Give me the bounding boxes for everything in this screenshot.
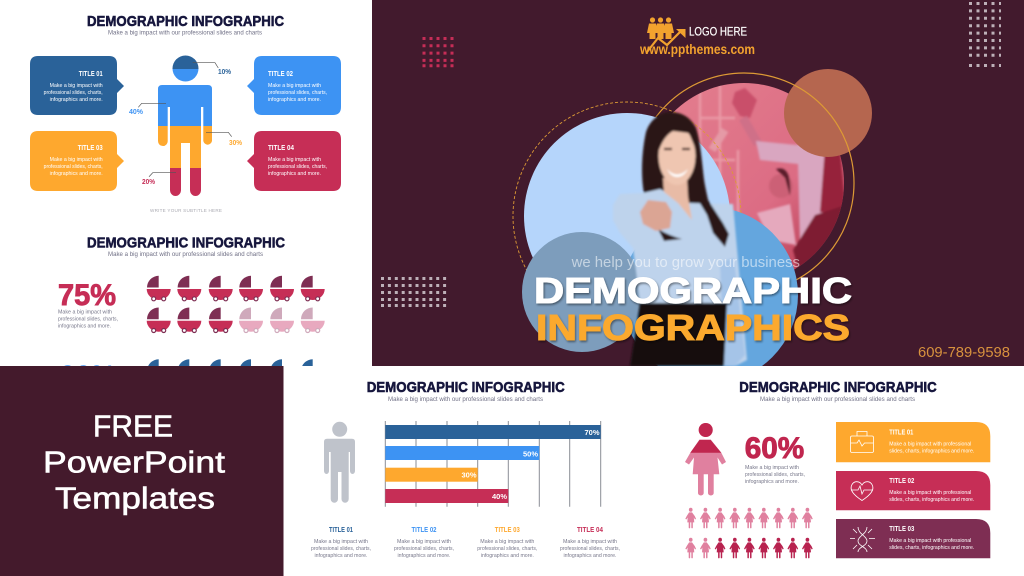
text block: women description: infographics and more. <box>745 479 799 485</box>
chart: horizontal bars <box>385 421 601 507</box>
chart: horizontal bars: 30% <box>461 470 477 480</box>
heading: free: FREE <box>93 409 173 444</box>
card: title 03 <box>836 519 990 558</box>
icon: grey person <box>324 422 355 503</box>
callout: title 02 <box>247 56 341 115</box>
window frames <box>700 85 738 215</box>
gold ring <box>655 72 855 280</box>
medium blue circle <box>630 210 798 366</box>
text block: women description: professional slides, charts, <box>745 472 805 478</box>
subtitle: slide one: Make a big impact with our professional slides and charts <box>108 30 262 36</box>
icon: heart pulse <box>851 482 873 500</box>
dot grid: top right <box>969 4 1001 66</box>
front hair left <box>658 229 682 241</box>
pictogram: row of light women <box>685 508 813 528</box>
panel: cover photo banner <box>372 0 1024 383</box>
callout: title 03: TITLE 03 <box>78 145 103 152</box>
column: title 04: Make a big impact with <box>563 539 617 545</box>
callout leaders and percentages <box>129 63 242 186</box>
card: title 01: slides, charts, infographics and more. <box>889 448 974 454</box>
callout: title 02: TITLE 02 <box>268 71 293 78</box>
smile <box>667 169 688 177</box>
callout: title 04 <box>247 131 341 191</box>
text block: stroller description: professional slides, charts, <box>58 316 118 322</box>
heading: templates: Templates <box>55 481 215 516</box>
heading: bar slide title: DEMOGRAPHIC INFOGRAPHIC <box>367 379 565 396</box>
callout: title 04: TITLE 04 <box>268 145 294 152</box>
text block: women description: Make a big impact with <box>745 465 799 471</box>
panel: free templates <box>0 366 284 576</box>
light blue circle <box>524 113 730 258</box>
callout leaders and percentages: 20% <box>142 177 155 186</box>
column: title 02 <box>394 527 454 559</box>
card: title 03: TITLE 03 <box>889 526 914 533</box>
eyes <box>664 148 690 150</box>
pictogram: cropped blue stroller row <box>148 359 313 366</box>
front hair right <box>694 150 729 247</box>
dot grid: bottom left <box>381 278 450 306</box>
callout: title 03: Make a big impact with <box>50 157 103 163</box>
caption: write your subtitle: WRITE YOUR SUBTITLE HERE <box>150 208 222 213</box>
column: title 03: TITLE 03 <box>495 527 520 534</box>
column: title 02: TITLE 02 <box>412 527 437 534</box>
pictogram: row of mixed women <box>685 538 813 558</box>
callout: title 02: professional slides, charts, <box>268 90 327 96</box>
phone number: 609-789-9598 <box>918 345 1010 361</box>
chart: horizontal bars: 50% <box>523 450 538 458</box>
column: title 03 <box>477 527 537 559</box>
callout: title 03 <box>30 131 124 191</box>
chart: segmented human figure <box>158 56 212 196</box>
tagline: we help you to grow your business <box>571 254 800 271</box>
subtitle: bar slide: Make a big impact with our professional slides and charts <box>388 397 543 403</box>
subtitle: slide two: Make a big impact with our professional slides and charts <box>108 252 263 258</box>
callout leaders and percentages: 10% <box>218 67 231 76</box>
callout leaders and percentages: 40% <box>129 107 143 116</box>
column: title 01: infographics and more. <box>314 553 368 559</box>
callout: title 01: Make a big impact with <box>50 83 103 89</box>
heading: women slide title: DEMOGRAPHIC INFOGRAPHIC <box>739 379 937 396</box>
website: www.ppthemes.com <box>639 42 755 57</box>
column: title 01: professional slides, charts, <box>311 546 371 552</box>
raised hand and arm <box>732 88 757 118</box>
column: title 01: TITLE 01 <box>329 527 353 534</box>
standing man <box>756 140 824 245</box>
column: title 04: TITLE 04 <box>577 527 603 534</box>
panel: women statistics slide <box>652 366 1024 576</box>
icon: large woman <box>685 423 726 496</box>
title: infographics: INFOGRAPHICS <box>536 307 850 348</box>
callout: title 02: Make a big impact with <box>268 83 321 89</box>
callout leaders and percentages: 30% <box>229 138 242 147</box>
fringe <box>659 125 696 150</box>
text block: stroller description: infographics and more. <box>58 324 111 330</box>
face <box>658 127 696 185</box>
statistic: 60 percent: 60% <box>745 432 804 465</box>
column: title 04: infographics and more. <box>564 553 616 559</box>
text block: stroller description <box>58 310 118 330</box>
callout: title 01 <box>30 56 124 115</box>
chart: horizontal bars: 70% <box>584 428 600 437</box>
shirt <box>613 189 747 366</box>
column: title 02: Make a big impact with <box>397 539 451 545</box>
callout: title 04: professional slides, charts, <box>268 164 327 170</box>
heading: slide one title: DEMOGRAPHIC INFOGRAPHIC <box>87 13 284 30</box>
statistic: cropped blue percentage: 90% <box>60 360 116 393</box>
subtitle: women slide: Make a big impact with our professional slides and charts <box>760 397 915 403</box>
skirt <box>630 303 727 366</box>
card: title 02 <box>836 471 990 510</box>
heading: powerpoint: PowerPoint <box>43 445 225 480</box>
card: title 03: Make a big impact with professional <box>889 538 971 544</box>
blue grey hatched circle <box>522 232 642 352</box>
column: title 02: professional slides, charts, <box>394 546 454 552</box>
heading: slide two title: DEMOGRAPHIC INFOGRAPHIC <box>87 234 285 251</box>
column: title 03: infographics and more. <box>481 553 534 559</box>
card: title 03: slides, charts, infographics and more. <box>889 545 974 551</box>
icon: dna helix <box>850 527 875 552</box>
card: title 02: Make a big impact with professional <box>889 490 971 496</box>
column: title 04: professional slides, charts, <box>560 546 620 552</box>
column: title 02: infographics and more. <box>398 553 450 559</box>
pointing hand <box>640 200 672 231</box>
card: title 01: Make a big impact with professional <box>889 442 971 448</box>
chart: horizontal bars: 40% <box>492 492 507 501</box>
card: title 01: TITLE 01 <box>889 430 913 436</box>
column: title 01: Make a big impact with <box>314 539 368 545</box>
logo: people with rising arrow <box>647 17 686 52</box>
panel: bar chart slide <box>284 366 652 576</box>
callout: title 03: infographics and more. <box>50 171 103 177</box>
pictogram: strollers at 75 percent <box>147 276 325 332</box>
column: title 03: Make a big impact with <box>480 539 535 545</box>
neck <box>663 178 692 220</box>
column: title 03: professional slides, charts, <box>477 546 537 552</box>
dot grid: pink <box>422 38 454 66</box>
hatched orange circle <box>784 69 872 157</box>
callout: title 04: infographics and more. <box>268 171 321 177</box>
logo text: LOGO HERE <box>689 26 747 38</box>
text block: stroller description: Make a big impact with <box>58 310 112 316</box>
text block: women description <box>745 465 805 485</box>
title: demographic: DEMOGRAPHIC <box>534 270 852 311</box>
card: title 02: slides, charts, infographics and more. <box>889 497 974 503</box>
callout: title 01: professional slides, charts, <box>44 90 103 96</box>
callout: title 02: infographics and more. <box>268 97 321 103</box>
callout: title 01: TITLE 01 <box>79 71 103 78</box>
card: title 01 <box>836 422 990 462</box>
card: title 02: TITLE 02 <box>889 478 914 485</box>
dark figures at right <box>818 155 844 214</box>
seated man <box>769 174 793 198</box>
back hair <box>642 112 708 210</box>
callout: title 03: professional slides, charts, <box>44 164 103 170</box>
column: title 01 <box>311 527 371 559</box>
column: title 04 <box>560 527 620 559</box>
callout: title 04: Make a big impact with <box>268 157 321 163</box>
dashed ring <box>512 102 742 270</box>
icon: medical briefcase <box>850 432 874 452</box>
statistic: 75 percent: 75% <box>58 279 116 312</box>
callout: title 01: infographics and more. <box>50 97 103 103</box>
woman pointing <box>613 112 747 366</box>
team photo in red circle <box>672 83 844 270</box>
panel: demographic person slide and stroller slide <box>30 16 341 366</box>
